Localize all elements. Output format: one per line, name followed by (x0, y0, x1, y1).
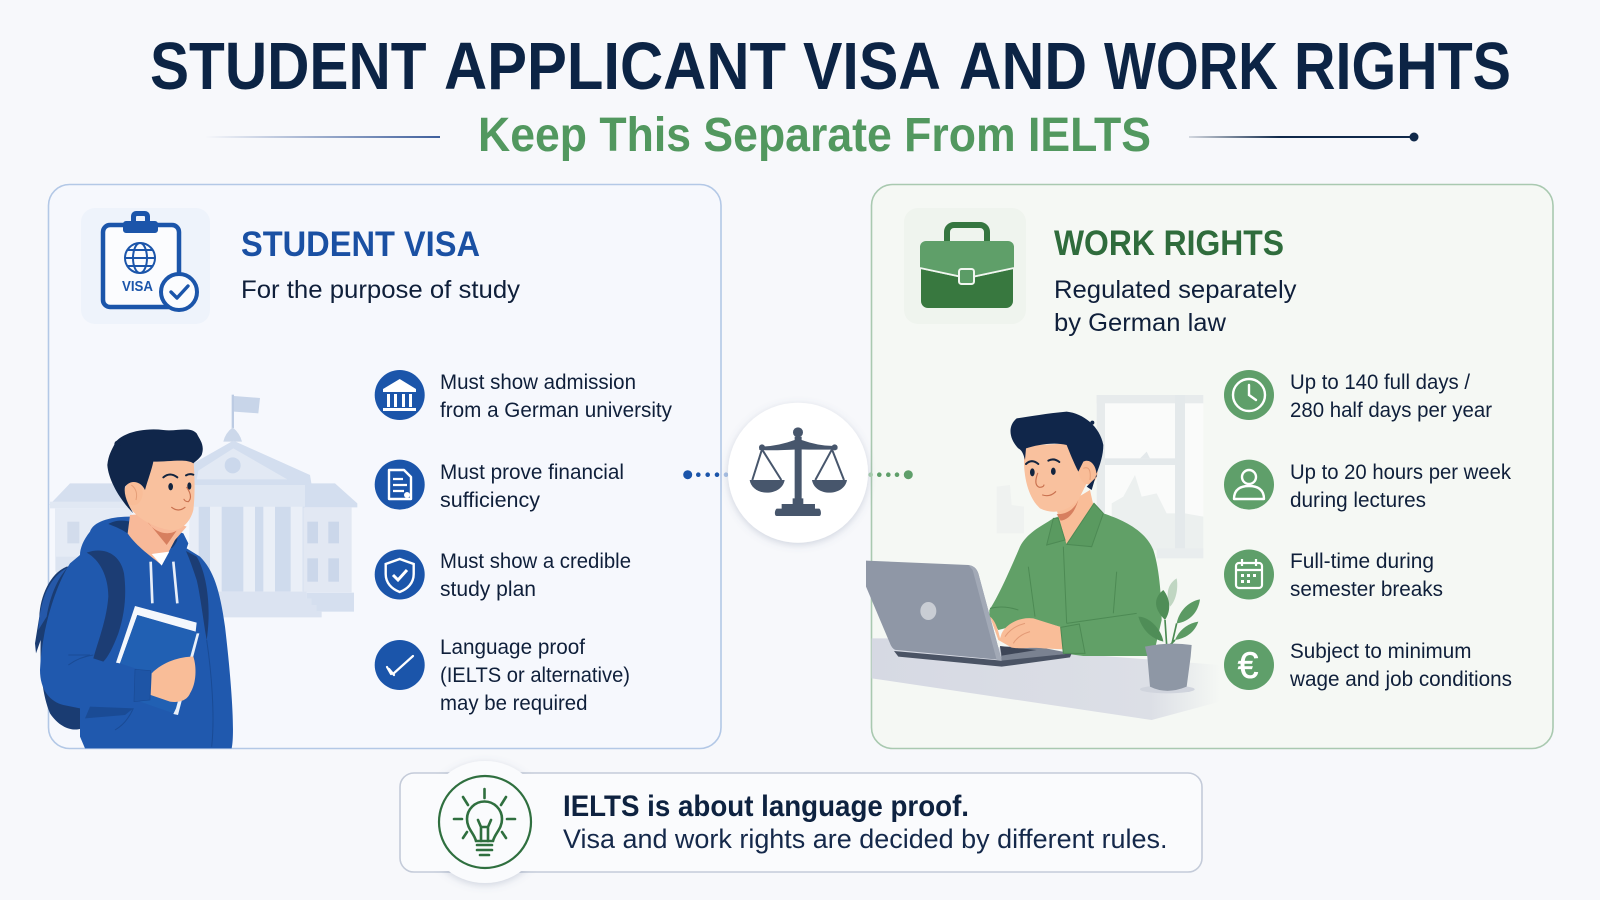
item: semester breaks (1224, 549, 1443, 601)
illustration: office window (997, 395, 1203, 558)
panel: work rights (866, 184, 1553, 748)
subtitle right rule (1189, 132, 1418, 142)
subtitle left rule (205, 136, 440, 138)
icon: balance scale badge (728, 403, 868, 543)
item: financial sufficiency: sufficiency (440, 488, 540, 512)
item: admission: from a German university (440, 398, 672, 422)
item: language proof: Language proof (440, 635, 585, 659)
item: minimum wage: € (1238, 645, 1259, 686)
item: hours per week: Up to 20 hours per week (1290, 460, 1511, 484)
item: hours per week (1224, 460, 1511, 512)
subheading: student visa: For the purpose of study (241, 276, 521, 304)
item: days per year: 280 half days per year (1290, 398, 1492, 422)
item: minimum wage: wage and job conditions (1289, 667, 1512, 691)
callout heading: IELTS is about language proof. (563, 790, 969, 823)
illustration: student with backpack and book (35, 429, 233, 748)
item: hours per week: during lectures (1290, 488, 1426, 512)
icon: briefcase (904, 208, 1026, 324)
icon: visa clipboard: VISA (122, 279, 153, 295)
icon: light bulb (401, 761, 1201, 883)
icon: visa clipboard (81, 208, 210, 324)
item: days per year (1224, 370, 1492, 422)
illustration: person working on laptop (866, 412, 1220, 720)
item: language proof: (IELTS or alternative) (440, 663, 630, 687)
title: WORK (1104, 29, 1278, 104)
subtitle: Keep This Separate From IELTS (478, 109, 1151, 162)
heading: work rights: WORK RIGHTS (1054, 224, 1284, 263)
title: VISA (803, 29, 941, 104)
panel: student visa (35, 184, 721, 748)
title: AND (959, 29, 1087, 104)
connector: work side dots (868, 470, 913, 479)
item: admission: Must show admission (440, 370, 636, 394)
subheading: work rights: Regulated separately (1054, 276, 1297, 304)
title: RIGHTS (1294, 29, 1511, 104)
item: language proof: may be required (440, 691, 588, 715)
item: semester breaks: Full-time during (1290, 549, 1434, 573)
title (150, 29, 1511, 104)
illustration: university building (49, 395, 357, 617)
item: financial sufficiency (375, 460, 624, 512)
heading: student visa: STUDENT VISA (241, 225, 480, 264)
subheading: work rights: by German law (1054, 309, 1227, 337)
item: study plan: study plan (440, 577, 536, 601)
item: study plan: Must show a credible (440, 549, 631, 573)
item: minimum wage (1224, 639, 1512, 691)
title: APPLICANT (444, 29, 786, 104)
subheading: work rights (1054, 276, 1297, 337)
item: admission (375, 370, 672, 422)
connector: visa side dots (683, 470, 728, 479)
item: semester breaks: semester breaks (1290, 577, 1443, 601)
item: days per year: Up to 140 full days / (1290, 370, 1470, 394)
item: study plan (375, 549, 631, 601)
item: minimum wage: Subject to minimum (1290, 639, 1472, 663)
item: financial sufficiency: Must prove financial (440, 460, 624, 484)
title: STUDENT (150, 29, 427, 104)
list: work rights conditions (1224, 370, 1512, 691)
item: language proof (375, 635, 630, 715)
callout text: Visa and work rights are decided by different rules. (563, 824, 1168, 854)
callout: IELTS reminder (400, 761, 1202, 883)
list: student visa requirements (375, 370, 672, 715)
